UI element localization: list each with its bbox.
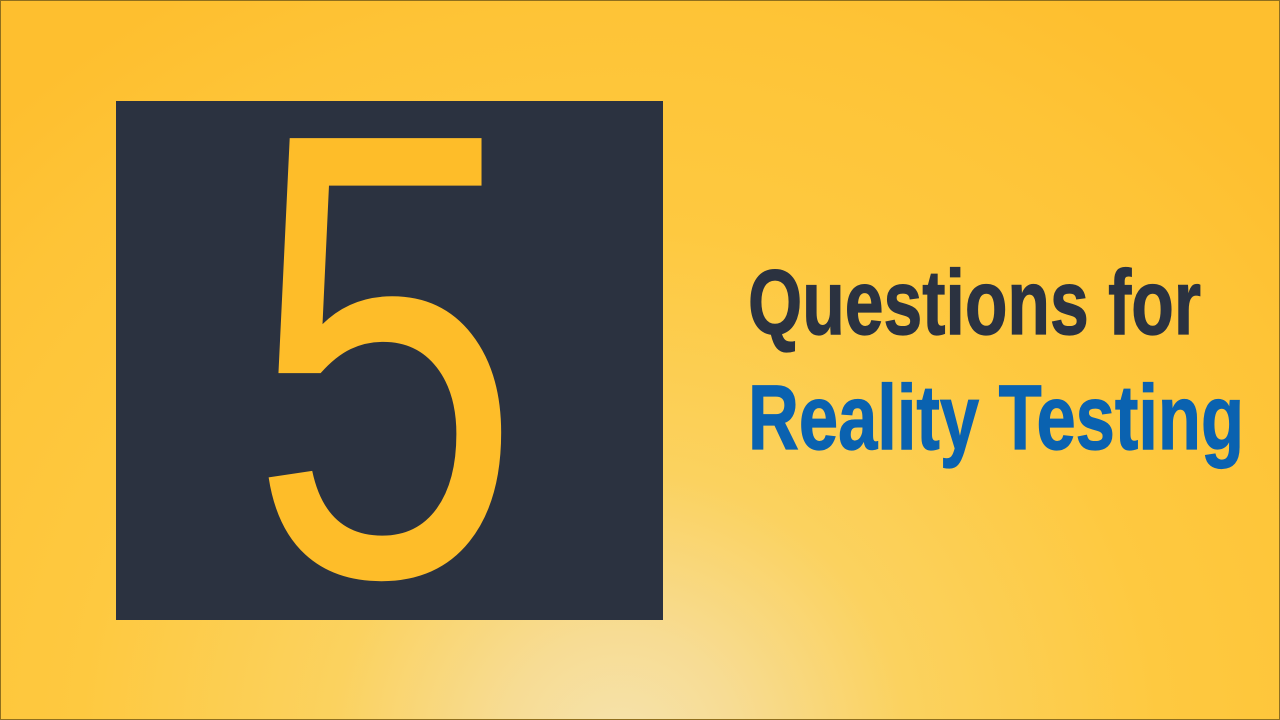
panel: dark number square [116,101,663,620]
large numeral 5: 5 [249,1,522,710]
